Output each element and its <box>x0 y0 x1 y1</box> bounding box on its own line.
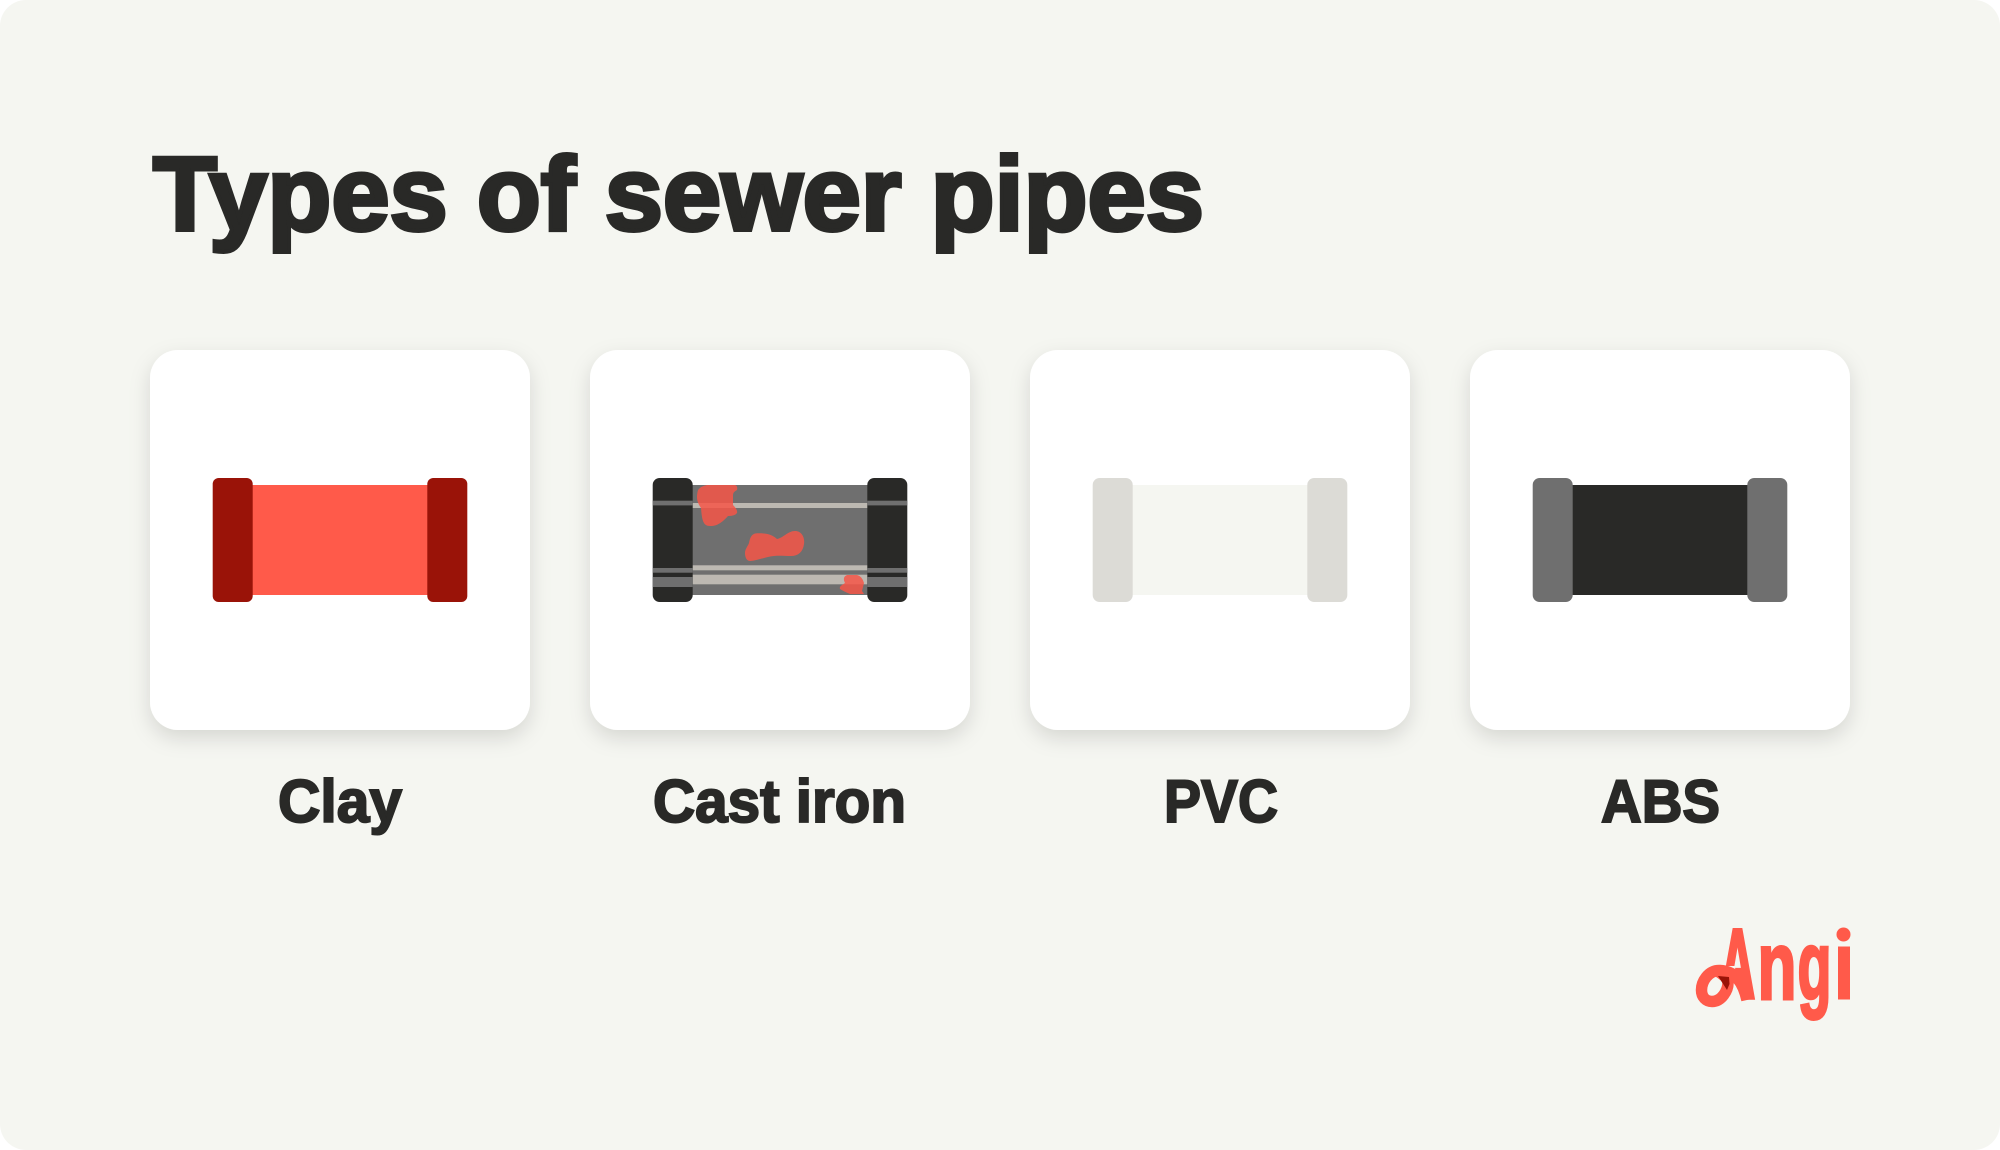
card: cast iron <box>590 350 970 730</box>
icon: ABS pipe <box>1533 478 1787 602</box>
card: clay <box>150 350 530 730</box>
card: ABS <box>1470 350 1850 730</box>
panel: cast iron pipe <box>590 350 970 730</box>
logo: Angi <box>1696 928 1850 1021</box>
icon: clay pipe <box>213 478 467 602</box>
label: clay: Clay <box>278 768 403 835</box>
panel: ABS pipe <box>1470 350 1850 730</box>
logo: Angi: i <box>1838 998 1839 1000</box>
card: PVC <box>1030 350 1410 730</box>
icon: cast iron pipe <box>653 478 907 602</box>
label: PVC: PVC <box>1164 768 1278 835</box>
label: ABS: ABS <box>1601 768 1720 835</box>
logo: Angi: A <box>1720 909 1755 1019</box>
logo: Angi: n <box>1758 911 1796 1020</box>
panel: PVC pipe <box>1030 350 1410 730</box>
title: Types of sewer pipes <box>153 136 1204 253</box>
panel: clay pipe <box>150 350 530 730</box>
label: cast iron: Cast iron <box>653 768 906 835</box>
logo: Angi: g <box>1798 911 1832 1020</box>
icon: PVC pipe <box>1093 478 1347 602</box>
